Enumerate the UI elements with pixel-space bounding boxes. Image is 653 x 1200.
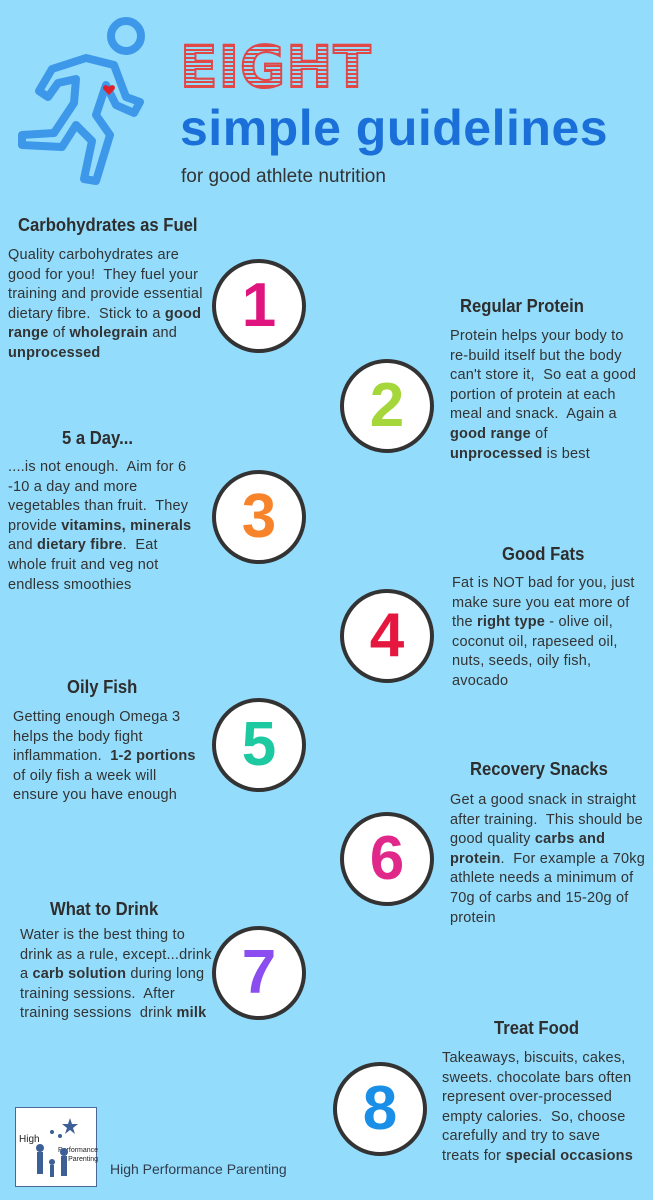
heading 8: Treat Food [494, 1017, 579, 1038]
text 4: coconut oil, rapeseed oil, [452, 634, 618, 650]
logo: High [19, 1134, 40, 1145]
text 6: after training. This should be [450, 812, 643, 828]
text 4 [452, 575, 635, 689]
text 7: training sessions. After [20, 986, 175, 1002]
text 8: empty calories. So, choose [442, 1109, 626, 1125]
text 7: training sessions drink milk [20, 1005, 206, 1021]
circle 2 [340, 359, 434, 453]
text 5: ensure you have enough [13, 787, 177, 803]
text 4: the right type - olive oil, [452, 614, 613, 630]
circle 7 [212, 926, 306, 1020]
text 1: good for you! They fuel your [8, 267, 198, 283]
circle 8 [333, 1062, 427, 1156]
text 2: unprocessed is best [450, 446, 590, 462]
text 6 [450, 792, 645, 926]
text 2: portion of protein at each [450, 387, 616, 403]
circle 7: 7 [242, 938, 276, 1007]
text 5: of oily fish a week will [13, 768, 156, 784]
heading 6: Recovery Snacks [470, 758, 608, 779]
text 1: dietary fibre. Stick to a good [8, 306, 201, 322]
text 4: make sure you eat more of [452, 595, 629, 611]
circle 6 [340, 812, 434, 906]
circle 4 [340, 589, 434, 683]
text 1 [8, 247, 203, 361]
heading 2: Regular Protein [460, 295, 584, 316]
logo [15, 1107, 97, 1187]
text 2: re-build itself but the body [450, 348, 622, 364]
text 4: Fat is NOT bad for you, just [452, 575, 635, 591]
text 2: can't store it, So eat a good [450, 367, 636, 383]
text 5: Getting enough Omega 3 [13, 709, 180, 725]
footer text: High Performance Parenting [110, 1161, 287, 1177]
text 3: vegetables than fruit. They [8, 498, 188, 514]
text 3: endless smoothies [8, 577, 132, 593]
text 6: Get a good snack in straight [450, 792, 636, 808]
circle 3 [212, 470, 306, 564]
text 3: ....is not enough. Aim for 6 [8, 459, 186, 475]
text 5: helps the body fight [13, 729, 143, 745]
text 7: Water is the best thing to [20, 927, 185, 943]
heading 4: Good Fats [502, 543, 584, 564]
text 8: sweets. chocolate bars often [442, 1070, 631, 1086]
text 6: protein. For example a 70kg [450, 851, 645, 867]
heading 7: What to Drink [50, 898, 158, 919]
heading 1: Carbohydrates as Fuel [18, 214, 198, 235]
title: simple guidelines: simple guidelines [180, 100, 608, 156]
text 1: unprocessed [8, 345, 100, 361]
text 8: represent over-processed [442, 1089, 612, 1105]
text 3 [8, 459, 191, 593]
text 8: Takeaways, biscuits, cakes, [442, 1050, 626, 1066]
text 1: training and provide essential [8, 286, 203, 302]
text 7 [20, 927, 212, 1021]
text 4: avocado [452, 673, 508, 689]
logo: Parenting [68, 1156, 98, 1163]
circle 4: 4 [370, 601, 404, 670]
subtitle: for good athlete nutrition [181, 166, 386, 187]
text 3: provide vitamins, minerals [8, 518, 191, 534]
icon: runner [18, 17, 145, 185]
circle 3: 3 [242, 482, 276, 551]
circle 6: 6 [370, 824, 404, 893]
text 8: treats for special occasions [442, 1148, 633, 1164]
title: EIGHT: EIGHT [180, 33, 372, 101]
text 3: whole fruit and veg not [8, 557, 158, 573]
logo: Performance [58, 1147, 98, 1154]
circle 1 [212, 259, 306, 353]
text 8: carefully and try to save [442, 1128, 600, 1144]
heading 5: Oily Fish [67, 676, 137, 697]
text 6: athlete needs a minimum of [450, 870, 633, 886]
circle 1: 1 [242, 271, 276, 340]
text 5 [13, 709, 196, 803]
text 6: good quality carbs and [450, 831, 605, 847]
text 1: Quality carbohydrates are [8, 247, 179, 263]
text 2: good range of [450, 426, 548, 442]
text 6: 70g of carbs and 15-20g of [450, 890, 629, 906]
text 2: Protein helps your body to [450, 328, 624, 344]
text 4: nuts, seeds, oily fish, [452, 653, 591, 669]
text 7: a carb solution during long [20, 966, 204, 982]
circle 5: 5 [242, 710, 276, 779]
text 6: protein [450, 910, 496, 926]
circle 5 [212, 698, 306, 792]
circle 8: 8 [363, 1074, 397, 1143]
text 8 [442, 1050, 633, 1164]
text 5: inflammation. 1-2 portions [13, 748, 196, 764]
text 3: and dietary fibre. Eat [8, 537, 158, 553]
heading 3: 5 a Day... [62, 427, 133, 448]
text 1: range of wholegrain and [8, 325, 177, 341]
text 7: drink as a rule, except...drink [20, 947, 212, 963]
text 2: meal and snack. Again a [450, 406, 617, 422]
text 2 [450, 328, 636, 462]
circle 2: 2 [370, 371, 404, 440]
text 3: -10 a day and more [8, 479, 137, 495]
